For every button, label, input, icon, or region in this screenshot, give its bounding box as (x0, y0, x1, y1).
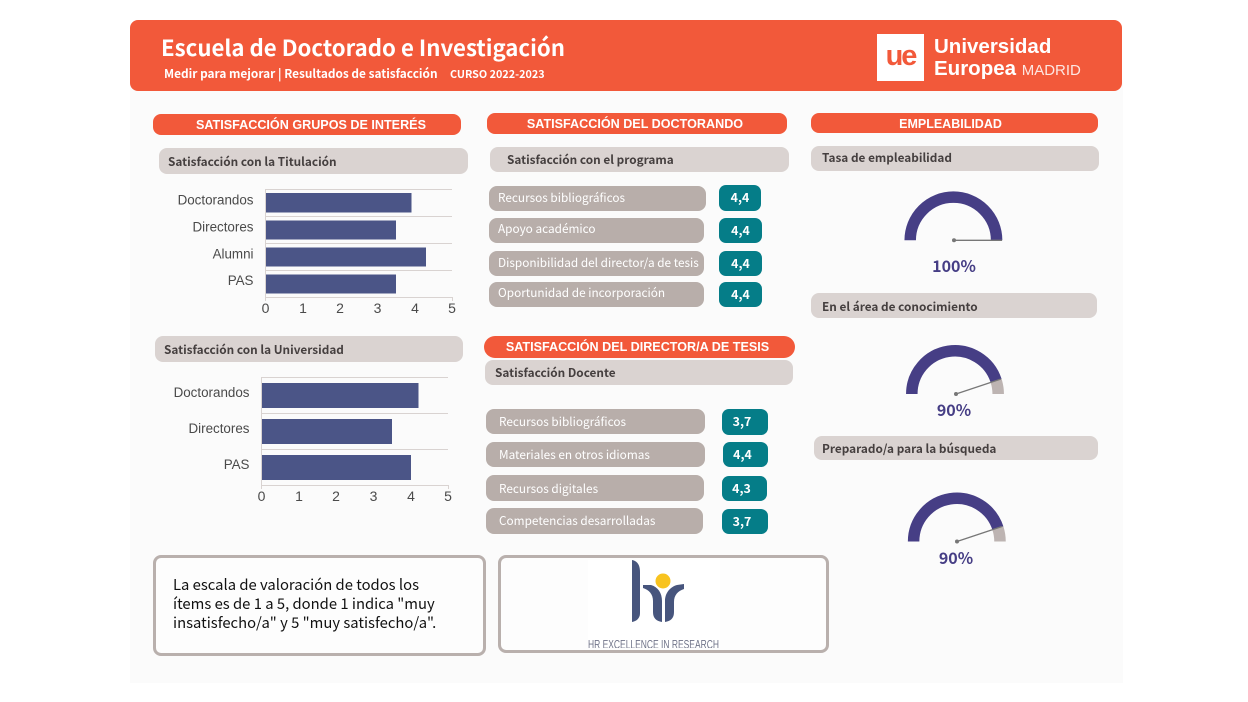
item: recursos bibliográficos (489, 186, 706, 211)
bar chart: titulación: PAS (228, 273, 254, 288)
subheading: tasa (811, 146, 1099, 171)
bar chart: universidad: Directores (188, 421, 250, 436)
callout text: insatisfecho/a" y 5 "muy satisfecho/a". (173, 612, 436, 633)
value 4,3 (722, 476, 767, 501)
subheading: búsqueda: Preparado/a para la búsqueda (822, 440, 996, 457)
value 4,4 (719, 185, 761, 211)
gauge: 90% área (906, 345, 1004, 396)
subheading: docente (485, 360, 793, 385)
item: disponibilidad: Disponibilidad del director/a de tesis (498, 254, 699, 271)
item: recursos bibliográficos: Recursos bibliográficos (498, 189, 625, 206)
bar chart: universidad: 1 (295, 488, 303, 504)
value 4,4 (719, 218, 762, 243)
item: apoyo académico: Apoyo académico (498, 220, 596, 237)
bar chart: universidad: 0 (258, 488, 266, 504)
section heading: empleabilidad (811, 113, 1098, 133)
bar chart: titulación: Alumni (213, 246, 254, 262)
value 3,7 (722, 409, 768, 435)
item: apoyo académico (489, 218, 704, 243)
subtitle: Medir para mejorar | Resultados de satisfacción (164, 65, 438, 82)
item: recursos digitales (486, 475, 704, 501)
title: Escuela de Doctorado e Investigación (161, 31, 565, 63)
section heading: empleabilidad: EMPLEABILIDAD (899, 117, 1002, 131)
callout text: La escala de valoración de todos los (173, 574, 419, 595)
section heading: director/a: SATISFACCIÓN DEL DIRECTOR/A DE TESIS (506, 340, 769, 354)
bar chart: titulación (178, 189, 456, 316)
callout: escala de valoración (153, 555, 486, 656)
item: competencias (486, 508, 703, 534)
bar chart: titulación: 1 (299, 300, 307, 316)
value 4,4: 4,4 (731, 254, 750, 272)
item: oportunidad (489, 282, 704, 307)
logo: Universidad Europea (877, 34, 1081, 81)
item: recursos bibliográficos: Recursos bibliográficos (499, 413, 626, 430)
subheading: titulación: Satisfacción con la Titulación (168, 153, 337, 170)
logo wordmark: Universidad (934, 35, 1051, 58)
item: recursos digitales: Recursos digitales (499, 480, 598, 497)
bar chart: universidad: Doctorandos (174, 385, 250, 400)
section heading: director/a (484, 336, 795, 358)
bar chart: universidad: PAS (224, 457, 250, 472)
gauge: 100% (904, 191, 1002, 242)
section heading: doctorando: SATISFACCIÓN DEL DOCTORANDO (527, 117, 743, 131)
subheading: área de conocimiento: En el área de conocimiento (822, 298, 978, 315)
bar chart: universidad: 4 (407, 488, 415, 504)
value: 90%: 90% (939, 545, 973, 569)
value: 90%: 90% (937, 397, 971, 421)
section heading: doctorando (487, 113, 787, 134)
subheading: universidad: Satisfacción con la Universidad (164, 341, 344, 358)
subheading: tasa: Tasa de empleabilidad (822, 149, 952, 166)
section heading: grupos de interés (153, 114, 461, 135)
logo wordmark: Europea MADRID (934, 57, 1081, 80)
icon: hr mark (632, 560, 684, 622)
list: director items (486, 409, 768, 534)
value 4,4 (719, 282, 762, 307)
bar chart: universidad: 3 (370, 488, 378, 504)
subheading: universidad (155, 336, 463, 362)
bar chart: titulación: 0 (262, 300, 270, 316)
bar chart: titulación: 2 (336, 300, 344, 316)
item: recursos bibliográficos (486, 409, 705, 434)
value 4,4 (723, 442, 768, 467)
list: doctorando items (489, 185, 762, 307)
value 4,4: 4,4 (731, 221, 750, 239)
subheading: docente: Satisfacción Docente (495, 364, 616, 381)
subheading: programa: Satisfacción con el programa (507, 151, 674, 168)
value 3,7: 3,7 (733, 512, 751, 530)
value: 100%: 100% (932, 253, 976, 277)
subheading: área de conocimiento (811, 293, 1097, 318)
logo wordmark (934, 35, 1081, 80)
value 4,4: 4,4 (733, 445, 752, 463)
item: competencias: Competencias desarrolladas (499, 512, 655, 529)
bar chart: titulación: 5 (448, 300, 456, 316)
subheading: titulación (159, 148, 468, 174)
header banner (130, 20, 1122, 91)
bar chart: titulación: 4 (411, 300, 419, 316)
item: materiales (486, 442, 705, 467)
value 4,4: 4,4 (731, 188, 749, 206)
course label: CURSO 2022-2023 (450, 66, 545, 82)
value 4,4 (719, 251, 762, 276)
bar chart: universidad (174, 377, 452, 504)
item: oportunidad: Oportunidad de incorporación (498, 284, 665, 301)
gauge: 90% búsqueda (908, 492, 1006, 544)
logo: HR excellence in research (588, 560, 719, 648)
bar chart: titulación: 3 (374, 300, 382, 316)
panel: HR logo (498, 555, 829, 653)
bar chart: titulación: Directores (192, 220, 254, 234)
bar chart: universidad: 5 (444, 488, 452, 504)
value 4,4: 4,4 (731, 285, 750, 303)
item: materiales: Materiales en otros idiomas (499, 446, 650, 463)
page background panel (130, 80, 1123, 683)
value 3,7 (722, 509, 768, 534)
value 4,3: 4,3 (732, 479, 751, 497)
value 3,7: 3,7 (733, 412, 751, 430)
item: disponibilidad (489, 251, 704, 276)
callout text (173, 574, 436, 633)
section heading: grupos de interés: SATISFACCIÓN GRUPOS DE INTERÉS (196, 118, 426, 132)
icon: ue mark (877, 34, 924, 81)
icon: ue mark: ue (886, 40, 915, 72)
bar chart: universidad: 2 (332, 488, 340, 504)
callout text: ítems es de 1 a 5, donde 1 indica "muy (173, 593, 435, 614)
bar chart: titulación: Doctorandos (178, 192, 254, 208)
subheading: programa (490, 147, 789, 172)
subheading: búsqueda (814, 436, 1098, 460)
